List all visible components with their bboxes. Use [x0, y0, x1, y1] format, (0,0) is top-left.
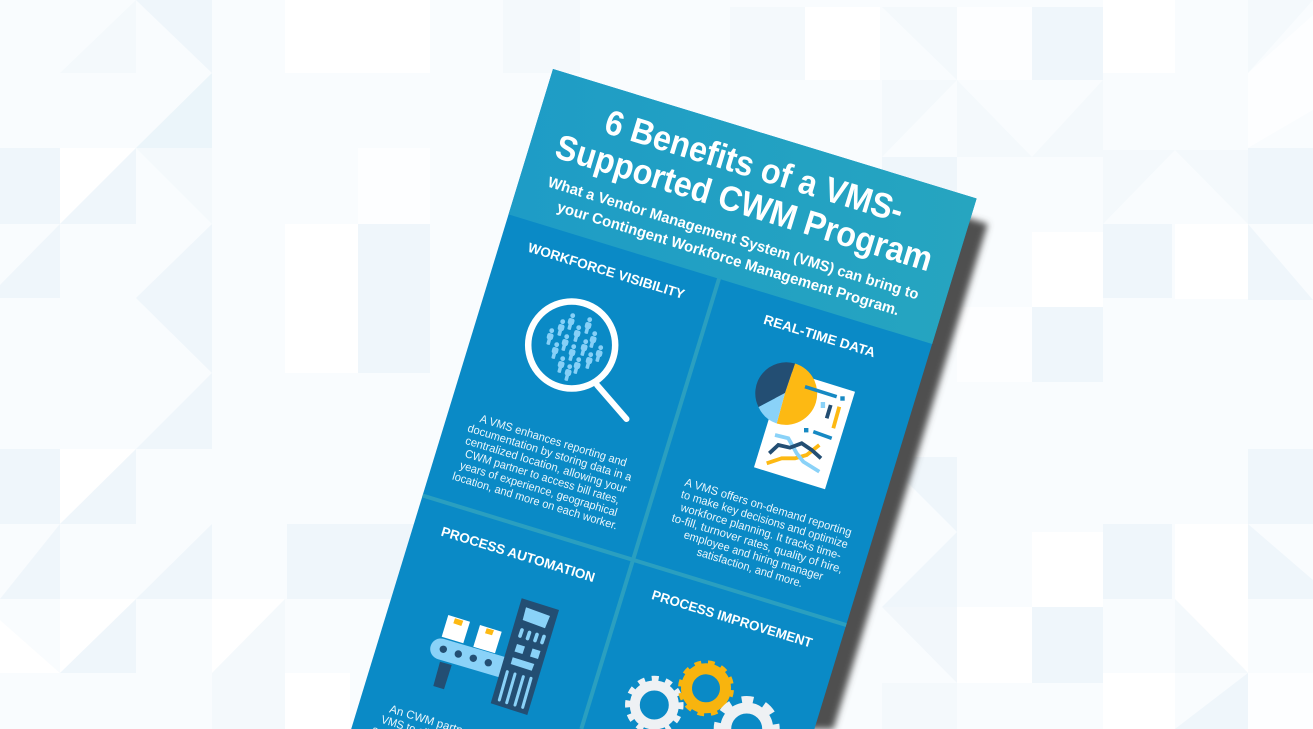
text: real-time data: to make key decisions and optimize	[679, 489, 849, 551]
title: Supported CWM Program	[551, 127, 937, 279]
heading: real-time data: REAL-TIME DATA	[762, 312, 877, 360]
gear: yellow	[679, 661, 733, 716]
text: workforce visibility: documentation by storing data in a	[466, 423, 634, 484]
gear: white left	[628, 678, 681, 729]
infographic page	[351, 69, 977, 729]
subtitle: your Contingent Workforce Management Program.	[555, 199, 901, 319]
text: workforce visibility: CWM partner to access bill rates,	[463, 448, 621, 507]
panel: header	[509, 69, 977, 344]
icon: gears	[628, 661, 776, 729]
title: 6 Benefits of a VMS-	[600, 103, 908, 231]
vertical divider	[581, 279, 719, 729]
text: real-time data: to-fill, turnover rates, quality of hire,	[670, 512, 844, 576]
text: real-time data: A VMS offers on-demand reporting	[683, 477, 853, 539]
text: real-time data: employee and hiring manager	[682, 529, 825, 583]
heading: process improvement: PROCESS IMPROVEMENT	[650, 587, 815, 651]
icon: conveyor automation	[433, 598, 559, 715]
text: real-time data: satisfaction, and more.	[695, 546, 804, 590]
subtitle: What a Vendor Management System (VMS) can bring to	[546, 174, 921, 303]
text: workforce visibility: location, and more on each worker.	[451, 471, 619, 532]
text: real-time data: workforce planning. It tracks time-	[678, 502, 842, 562]
gear: white right	[718, 700, 776, 729]
heading: workforce visibility: WORKFORCE VISIBILITY	[526, 240, 686, 302]
icon: magnifier with people	[528, 302, 626, 419]
page text	[370, 89, 953, 729]
page shadow	[566, 95, 988, 729]
icon: report with pie chart	[754, 362, 855, 489]
heading: process automation: PROCESS AUTOMATION	[439, 524, 597, 585]
text: workforce visibility: years of experience, geographical	[458, 460, 619, 519]
text: workforce visibility: centralized location, allowing your	[464, 435, 628, 496]
horizontal divider	[423, 496, 846, 625]
text: workforce visibility: A VMS enhances reporting and	[478, 413, 628, 469]
